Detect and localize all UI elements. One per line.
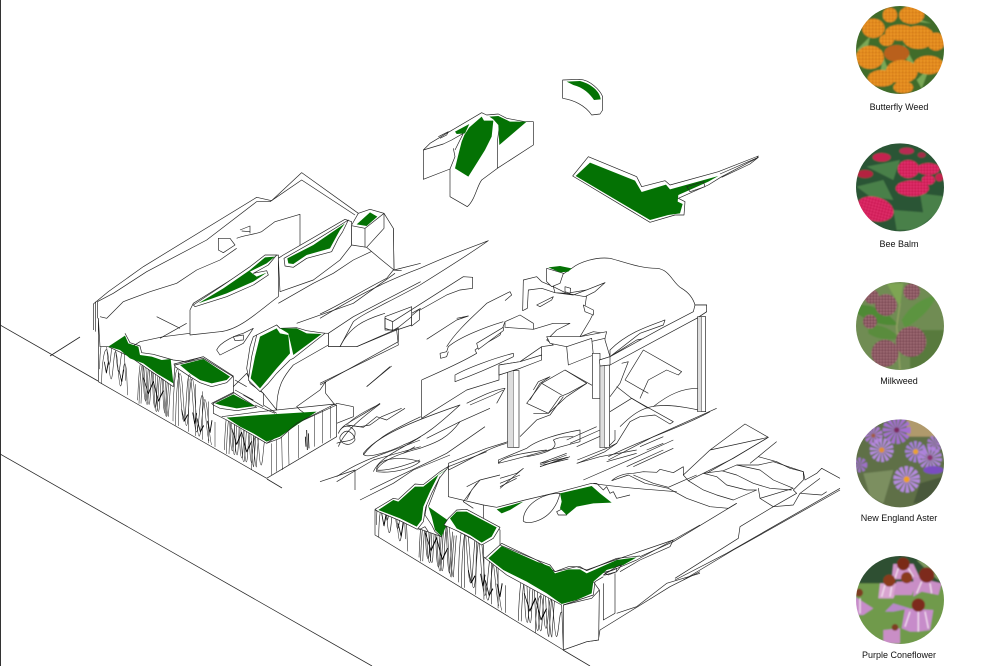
left site block xyxy=(93,173,421,493)
label: Butterfly Weed: Butterfly Weed xyxy=(870,102,928,112)
right return face xyxy=(563,590,599,650)
lower site block xyxy=(360,450,700,666)
column two xyxy=(600,365,609,448)
green bed: long front xyxy=(485,543,640,605)
central wall xyxy=(247,325,328,410)
right face hatching xyxy=(272,407,331,475)
green bed: square xyxy=(444,509,500,545)
green bed: sliver xyxy=(497,502,523,513)
rear terrain lines xyxy=(360,450,700,650)
green jagged top xyxy=(455,116,527,177)
floating planter: long green bed xyxy=(573,156,758,222)
green bed A xyxy=(193,255,277,307)
green bed: upper lawn patch xyxy=(560,486,612,515)
stair xyxy=(233,373,277,413)
label: Bee Balm: Bee Balm xyxy=(879,239,919,249)
corner planter xyxy=(352,212,384,247)
terrain contour lines xyxy=(320,241,717,490)
face hatching xyxy=(99,347,267,470)
page left border xyxy=(0,0,2,666)
back contour lines xyxy=(93,173,421,482)
small walls right of front xyxy=(297,382,353,437)
green bed: left fill xyxy=(378,468,448,527)
beam cap one xyxy=(499,355,542,375)
green bed B outline xyxy=(284,220,348,267)
narrow tail xyxy=(687,157,758,192)
raised planter wall: long front xyxy=(190,255,278,335)
front green beds xyxy=(108,333,335,443)
central green beds xyxy=(248,325,325,392)
floating planter: jagged block xyxy=(423,113,533,207)
column three xyxy=(698,317,706,412)
label: Milkweed: Milkweed xyxy=(880,376,918,386)
plant photo: Bee Balm xyxy=(856,143,944,232)
plant photo: New England Aster xyxy=(856,419,944,508)
long front face xyxy=(98,318,337,478)
green top xyxy=(567,81,601,100)
column two rear xyxy=(592,353,600,398)
plant photo: Butterfly Weed xyxy=(856,6,944,94)
upper plateau inner ledge xyxy=(600,305,707,365)
lower right stepped terrain xyxy=(612,424,840,580)
green bed: left xyxy=(375,466,449,529)
stepped path between columns xyxy=(520,350,682,447)
column one xyxy=(508,371,519,447)
planter small with green top xyxy=(547,266,572,287)
floating planter: small curved xyxy=(563,79,603,115)
plant photo: Purple Coneflower xyxy=(856,556,944,644)
arched terrace edge xyxy=(523,277,665,365)
front face xyxy=(375,510,563,650)
label: New England Aster: New England Aster xyxy=(861,513,937,523)
site ground lines xyxy=(0,325,590,666)
face hatching xyxy=(376,511,562,638)
slab and beam forms xyxy=(385,277,570,418)
beam cap two xyxy=(599,357,610,366)
green bed A fill xyxy=(198,257,275,303)
upper plateau xyxy=(553,258,707,357)
raised planter wall: mid xyxy=(278,219,352,292)
jagged gap lines xyxy=(418,477,442,537)
plant photo: Milkweed xyxy=(856,282,944,370)
green bed B fill xyxy=(287,223,345,264)
corner wall block xyxy=(352,209,394,270)
label: Purple Coneflower: Purple Coneflower xyxy=(862,650,936,660)
middle terrain and pergola linework xyxy=(320,241,717,490)
green bed: small middle xyxy=(428,507,448,537)
